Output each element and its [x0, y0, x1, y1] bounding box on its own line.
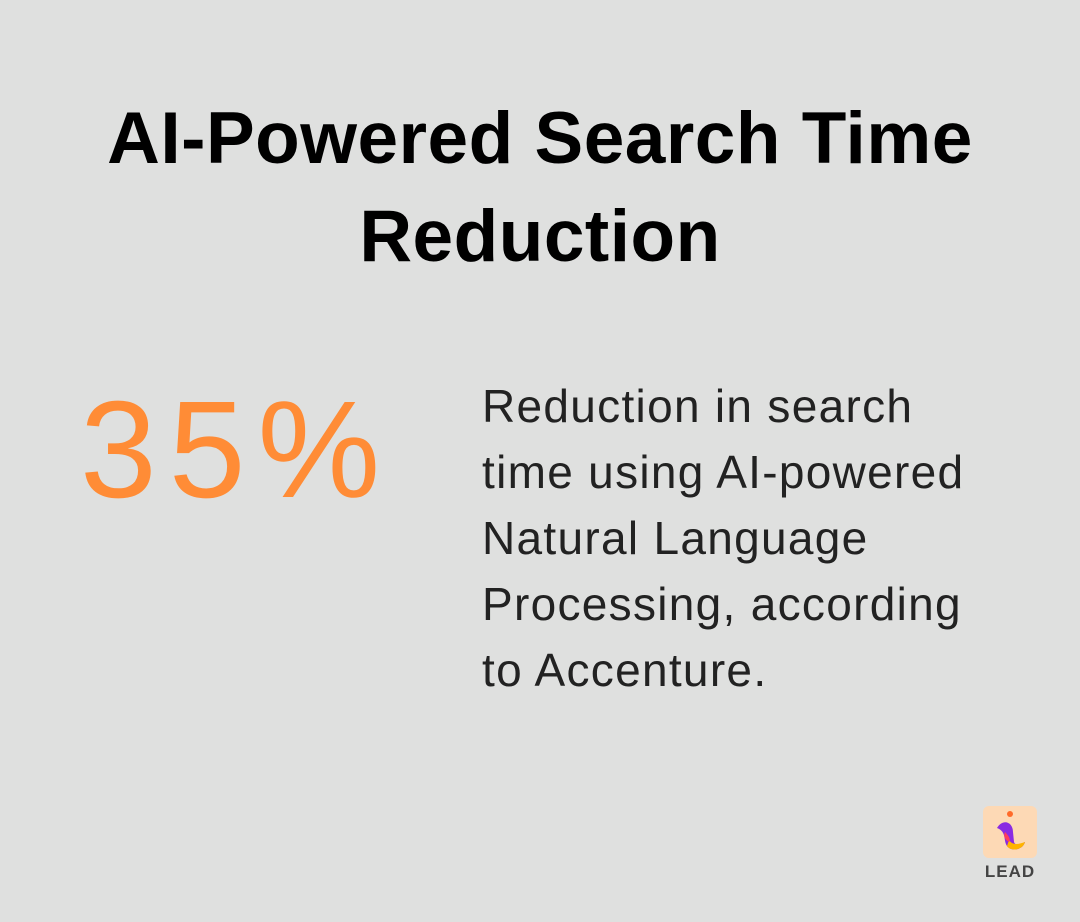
title: [107, 98, 973, 277]
title: AI-Powered Search Time: [107, 98, 973, 179]
description text: [482, 380, 964, 696]
description text: time using AI-powered: [482, 446, 964, 498]
description text: Processing, according: [482, 578, 962, 630]
logo text: LEAD: [985, 862, 1035, 881]
description text: Natural Language: [482, 512, 869, 564]
stat number: 35%: [80, 373, 392, 527]
description text: to Accenture.: [482, 644, 767, 696]
logo icon: [983, 806, 1037, 858]
description text: Reduction in search: [482, 380, 913, 432]
title: Reduction: [359, 196, 721, 277]
